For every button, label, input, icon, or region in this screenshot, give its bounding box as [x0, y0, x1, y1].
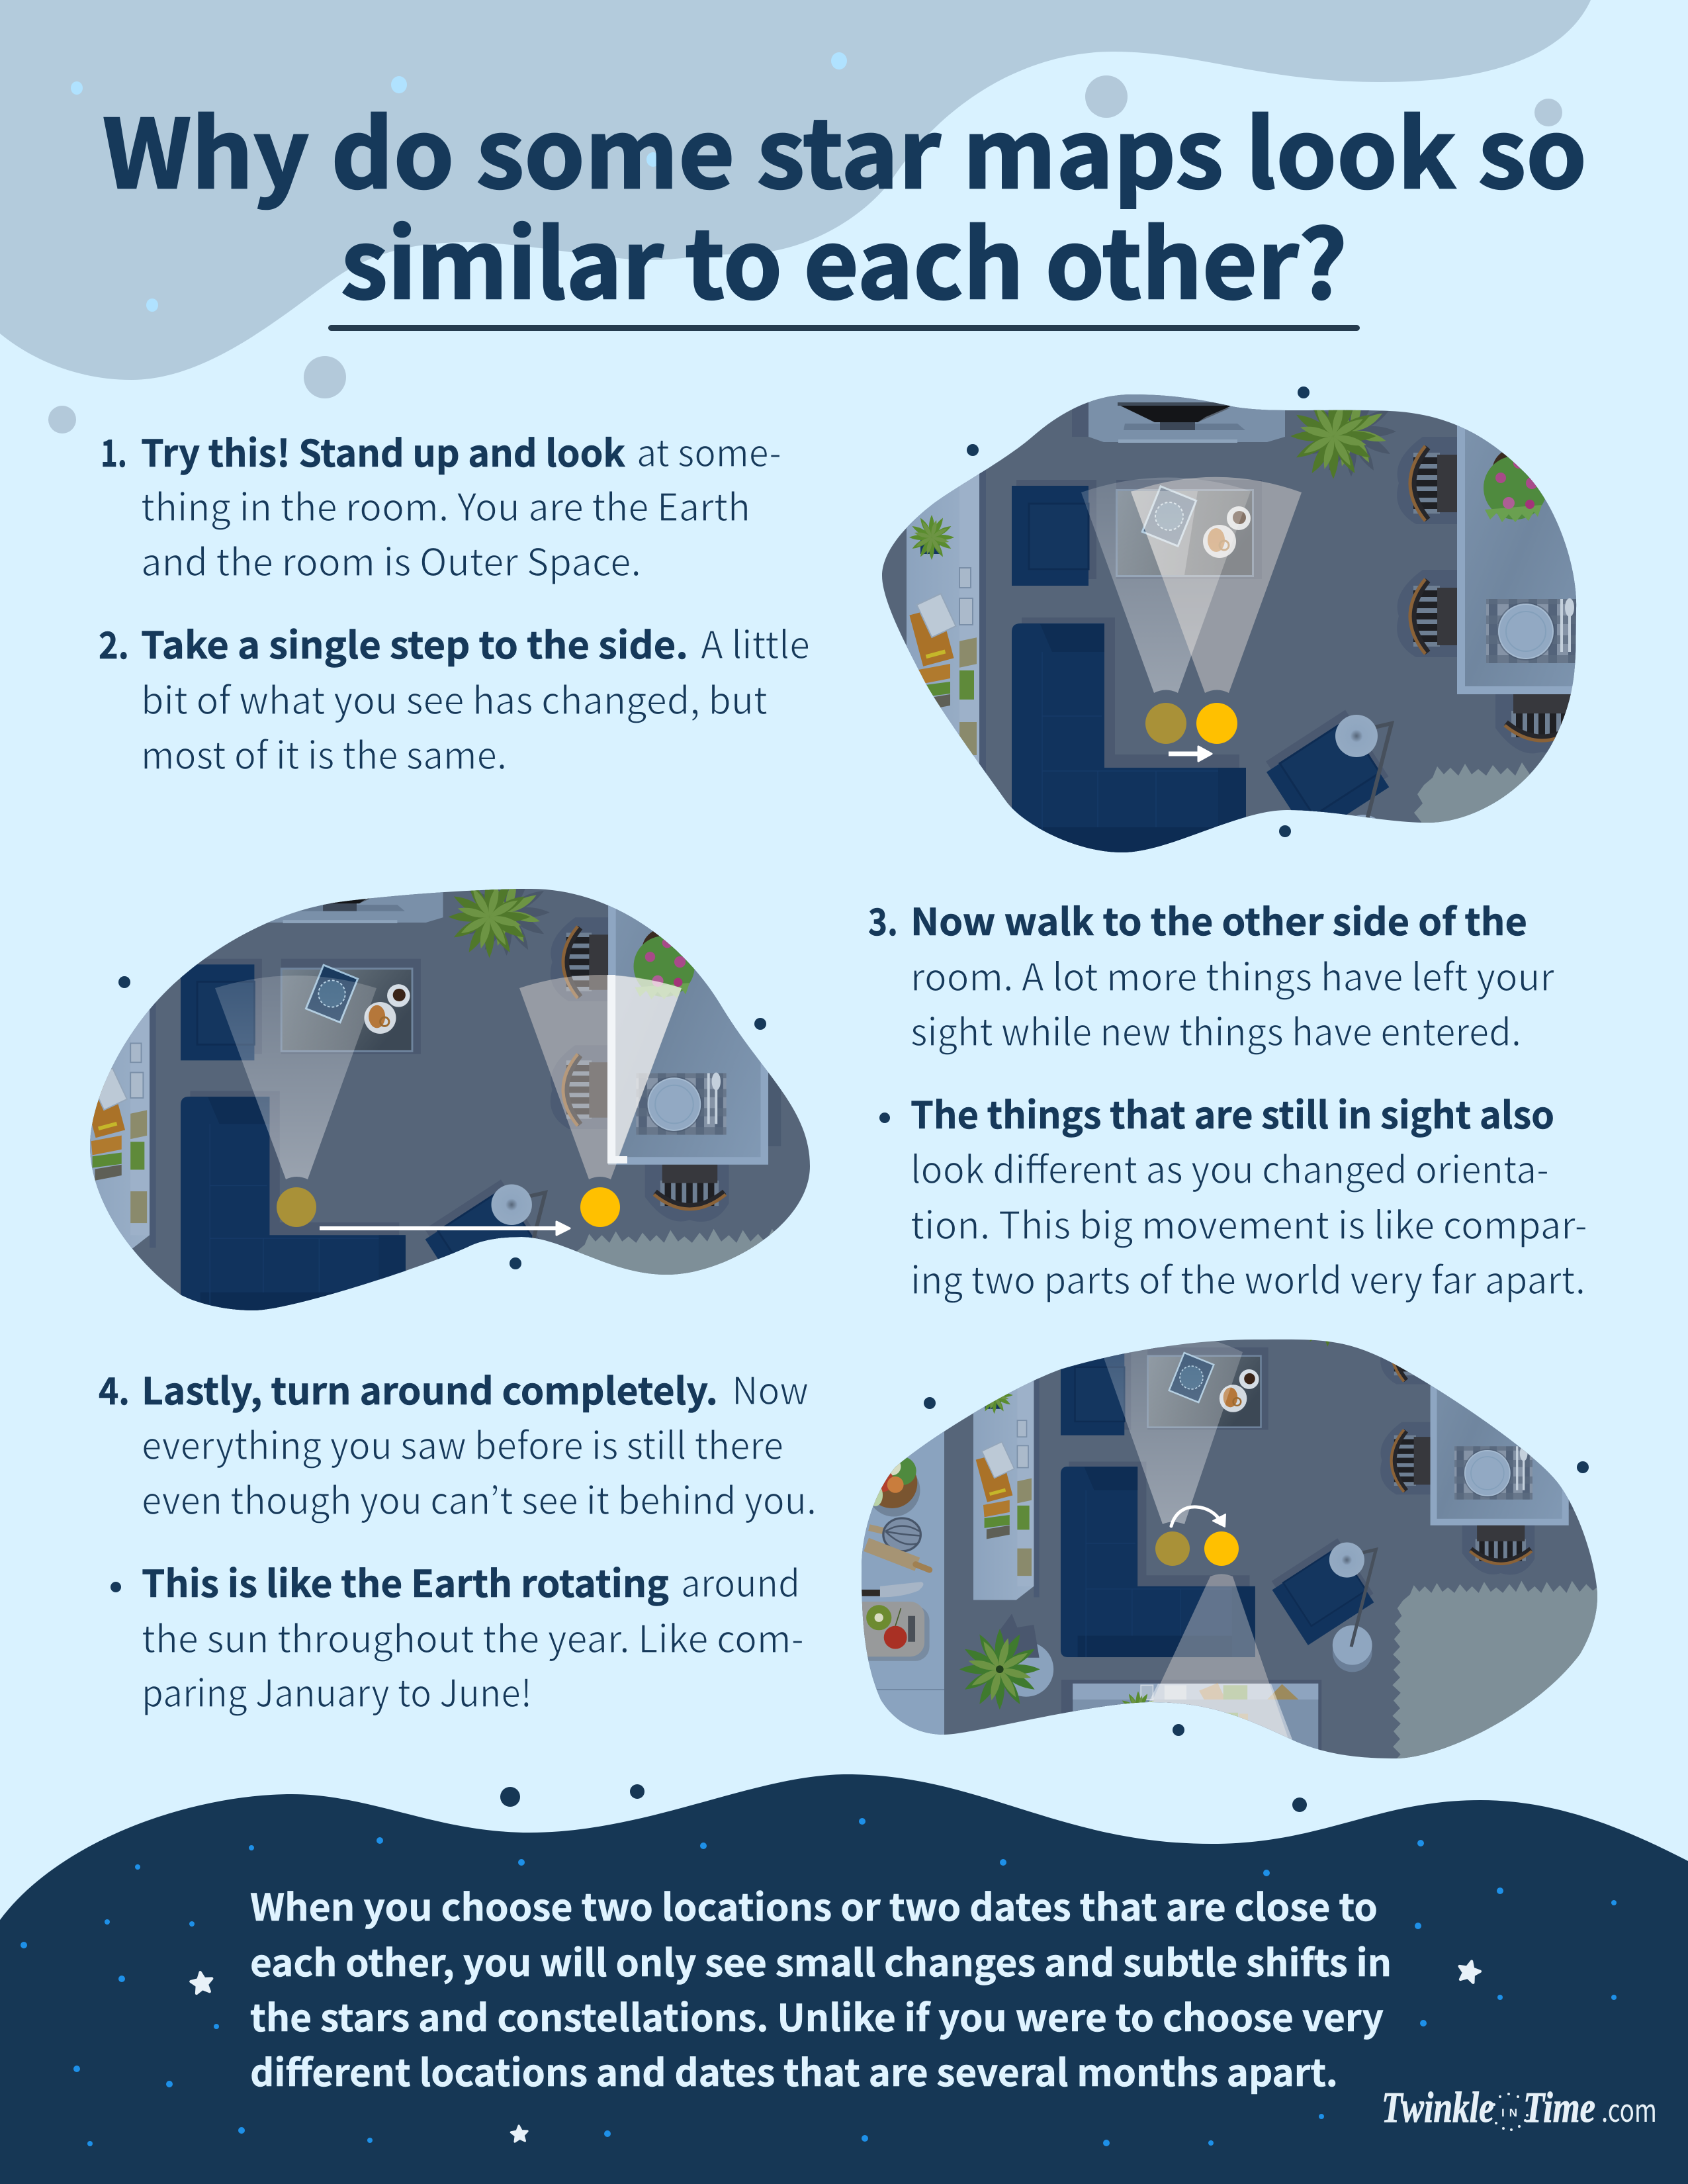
current position [1204, 1531, 1239, 1566]
logo: Time [1523, 2083, 1595, 2132]
navy dots above footer [500, 1784, 1307, 1812]
icon: star [190, 1971, 214, 1994]
text block: step 4: the sun throughout the year. Like com- [142, 1610, 804, 1664]
text block: step 4: Now [732, 1361, 809, 1416]
footer text: each other, you will only see small changes and subtle shifts in [250, 1934, 1392, 1987]
curved arrow [1171, 1507, 1225, 1527]
text block: step 4: around [681, 1554, 800, 1608]
text block: steps 1 and 2: 1. [101, 424, 127, 478]
text block: step 3: Now walk to the other side of the [911, 893, 1527, 946]
light cones [1081, 477, 1251, 693]
text block: step 3: The things that are still in sight also [911, 1086, 1554, 1140]
text block: steps 1 and 2: 2. [99, 616, 129, 670]
text block: steps 1 and 2: Take a single step to the side. [141, 616, 688, 670]
text block: steps 1 and 2: most of it is the same. [141, 726, 507, 780]
text block: step 3: look different as you changed orienta- [911, 1140, 1549, 1195]
text block: steps 1 and 2: at some- [637, 424, 781, 478]
text block: steps 1 and 2: A little [701, 615, 810, 670]
header wave shape [0, 0, 1591, 380]
header dots [48, 52, 1562, 433]
arrow [1169, 747, 1212, 761]
footer text: When you choose two locations or two dates that are close to [250, 1878, 1378, 1932]
text block: step 3: room. A lot more things have left your [911, 948, 1555, 1002]
arrow [320, 1222, 570, 1235]
current position [1196, 703, 1237, 744]
text block: step 3: tion. This big movement is like compar- [911, 1196, 1587, 1250]
text block: step 4: Lastly, turn around completely. [142, 1362, 718, 1416]
light cones [1102, 1334, 1243, 1524]
logo: Twinkle [1382, 2083, 1494, 2132]
icon: star [1456, 1959, 1482, 1983]
footer panel [0, 1774, 1688, 2184]
text block: steps 1 and 2: thing in the room. You are the Earth [141, 478, 750, 532]
icon: star [511, 2125, 528, 2142]
previous position [1155, 1531, 1190, 1566]
text block: steps 1 and 2 [99, 424, 810, 780]
text block: step 4: even though you can’t see it behind you. [142, 1471, 817, 1525]
text block: step 4: 4. [99, 1362, 130, 1416]
illustration: walk to the other side [90, 889, 810, 1310]
text block: step 4: This is like the Earth rotating [142, 1555, 669, 1608]
title: Why do some star maps look so [103, 79, 1587, 216]
text block: steps 1 and 2: and the room is Outer Space. [141, 533, 641, 587]
footer text: different locations and dates that are several months apart. [250, 2044, 1338, 2097]
illustration: one step to the side [882, 387, 1576, 852]
title [103, 79, 1587, 331]
text block: step 3: 3. [868, 893, 898, 946]
previous position [1145, 703, 1186, 744]
light cones [215, 976, 377, 1179]
footer text: the stars and constellations. Unlike if you were to choose very [250, 1989, 1384, 2042]
text block: steps 1 and 2: bit of what you see has changed, but [141, 671, 768, 725]
text block: step 4: everything you saw before is still there [142, 1416, 783, 1471]
footer star dots [21, 1818, 1617, 2146]
text block: step 4: paring January to June! [142, 1664, 532, 1718]
previous position [277, 1187, 316, 1227]
text block: step 4 [99, 1361, 817, 1718]
footer text [250, 1878, 1392, 2097]
logo: .com [1601, 2085, 1657, 2131]
illustration: turn around [862, 1340, 1597, 1758]
text block: step 3: sight while new things have entered. [911, 1003, 1521, 1057]
logo: IN [1501, 2107, 1517, 2119]
text block: steps 1 and 2: Try this! Stand up and look [141, 424, 625, 478]
text block: step 3: ing two parts of the world very far apart. [911, 1251, 1585, 1305]
current position [580, 1187, 620, 1227]
title: similar to each other? [341, 189, 1347, 326]
text block: step 3 [868, 893, 1587, 1305]
logo [1382, 2083, 1657, 2132]
